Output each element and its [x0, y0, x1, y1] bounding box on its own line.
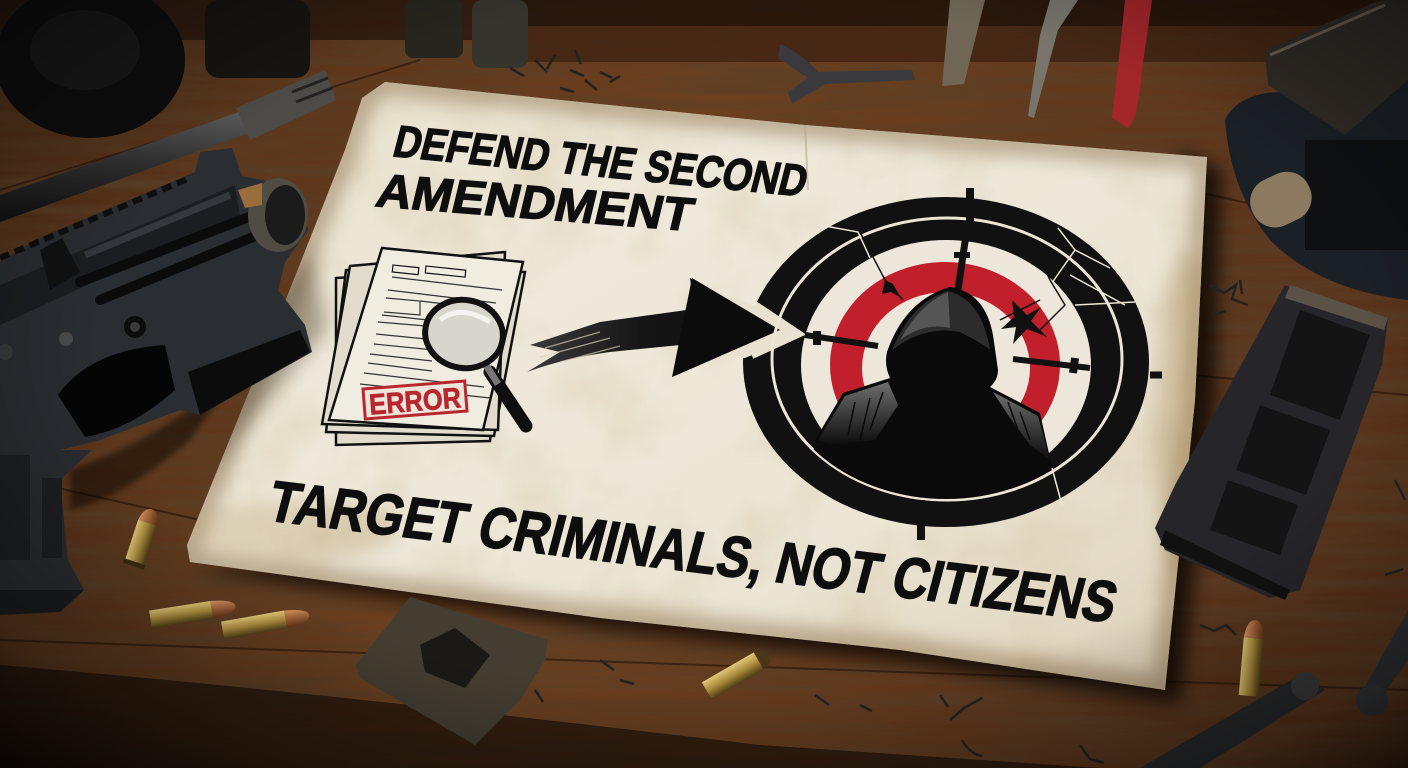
heading: defend the second amendment — [371, 116, 813, 242]
torn dark cloth patch — [356, 597, 548, 745]
tools bottom right — [1140, 610, 1408, 768]
heading: defend the second amendment: AMENDMENT — [371, 165, 699, 242]
wedge cut for arrow — [720, 295, 800, 358]
outer black ring — [743, 197, 1149, 527]
dark equipment top left — [0, 0, 528, 138]
bench vise right — [1225, 0, 1408, 300]
metal shavings top — [510, 50, 620, 92]
magnifier — [420, 294, 526, 426]
gun receiver — [0, 148, 312, 615]
crosshair ticks — [805, 188, 1162, 540]
wrench top — [778, 44, 915, 104]
inner white field — [801, 240, 1091, 490]
arrow: documents to target — [527, 278, 780, 377]
gun shadow — [70, 370, 240, 510]
red ring — [830, 262, 1060, 468]
hooded figure silhouette — [805, 287, 1056, 510]
stamp: ERROR: ERROR — [368, 382, 462, 422]
magazine — [1155, 285, 1388, 600]
icon: document stack with magnifier — [322, 248, 526, 445]
target with hooded figure — [672, 188, 1162, 540]
gun barrel — [0, 70, 336, 222]
poster — [180, 70, 1220, 700]
bullets — [123, 506, 1265, 700]
bullet holes and cracks — [882, 280, 1047, 344]
thin white ring — [772, 218, 1122, 500]
stacked back sheets — [322, 252, 525, 445]
heading: target criminals, not citizens: TARGET CRIMINALS, NOT CITIZENS — [262, 470, 1124, 635]
scattered metal debris — [535, 280, 1405, 763]
poster shadow — [195, 150, 1222, 704]
heading: defend the second amendment: DEFEND THE SECOND — [388, 116, 813, 206]
pliers and tools top right — [942, 0, 1152, 128]
front sheet — [329, 248, 523, 430]
